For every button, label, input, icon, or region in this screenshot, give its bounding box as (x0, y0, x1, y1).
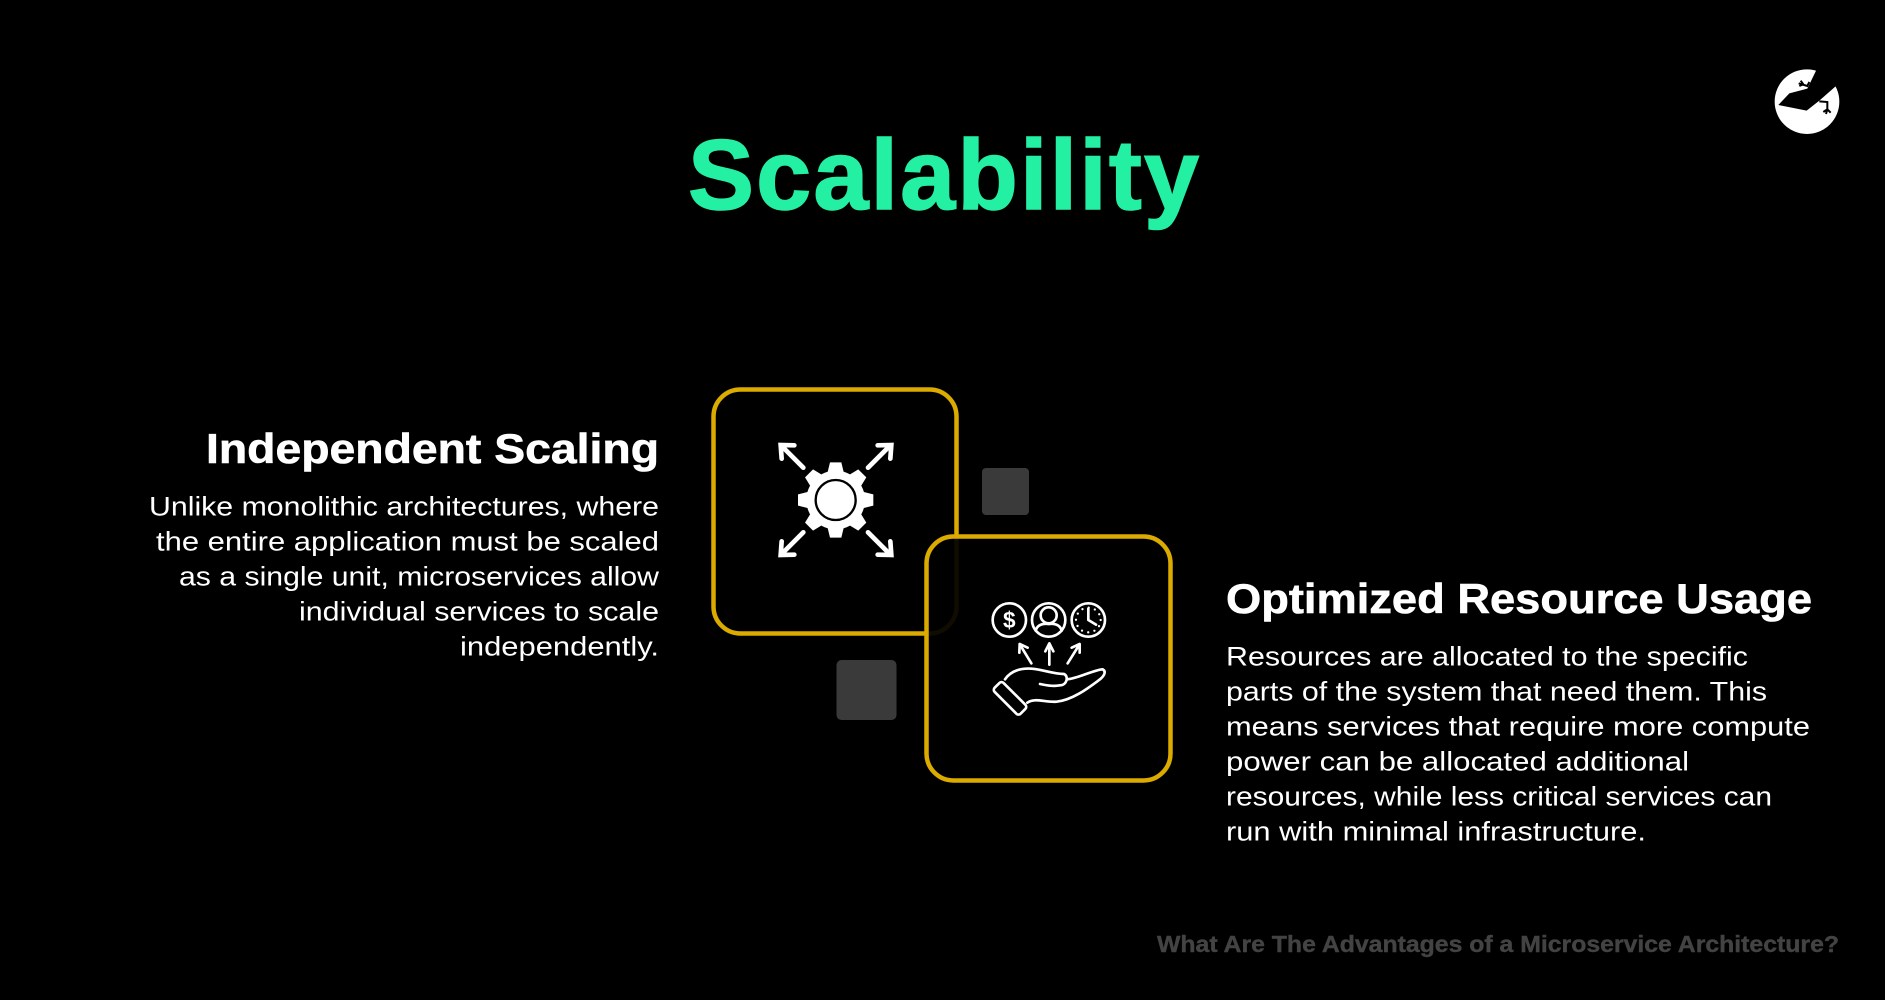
description: optimized resource usage: Resources are allocated to the specific (1226, 642, 1748, 672)
description: optimized resource usage: power can be allocated additional (1226, 746, 1689, 776)
description: independent scaling: independently. (460, 632, 659, 662)
gray square: lower (836, 660, 896, 720)
description: optimized resource usage (1226, 642, 1810, 846)
description: optimized resource usage: resources, while less critical services can (1226, 782, 1772, 812)
text block: independent scaling (149, 425, 660, 662)
icon: hand with dollar, person and clock (993, 603, 1105, 716)
description: independent scaling: individual services to scale (299, 596, 659, 626)
card: resource hand icon (926, 536, 1170, 780)
icon: gear with outward arrows (781, 445, 891, 555)
logo (1775, 67, 1842, 134)
description: independent scaling (149, 492, 660, 662)
description: independent scaling: Unlike monolithic architectures, where (149, 492, 659, 522)
icon: hand with dollar, person and clock: $ (1003, 607, 1016, 633)
card: gear icon (714, 390, 956, 634)
gray square: upper (982, 468, 1029, 515)
description: optimized resource usage: run with minimal infrastructure. (1226, 816, 1646, 846)
heading: independent scaling: Independent Scaling (206, 425, 659, 472)
footer caption: What Are The Advantages of a Microservice Architecture? (1157, 931, 1839, 957)
text block: optimized resource usage (1226, 575, 1812, 846)
description: independent scaling: as a single unit, microservices allow (179, 562, 660, 592)
description: optimized resource usage: parts of the system that need them. This (1226, 676, 1767, 706)
heading: optimized resource usage: Optimized Resource Usage (1226, 575, 1812, 622)
title: Scalability (688, 119, 1199, 230)
description: optimized resource usage: means services that require more compute (1226, 712, 1810, 742)
description: independent scaling: the entire application must be scaled (156, 526, 659, 556)
